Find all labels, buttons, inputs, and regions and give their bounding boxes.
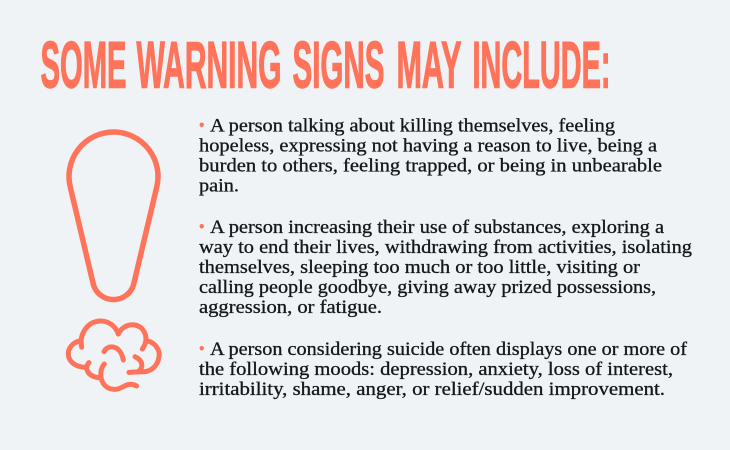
text block: warning sign talking about suicide <box>198 116 662 196</box>
text block: warning sign talking about suicide: burden to others, feeling trapped, or being in unbearable <box>199 156 662 176</box>
title <box>40 27 610 101</box>
text block: warning sign behaviours: calling people goodbye, giving away prized possessions, <box>199 277 656 298</box>
text block: warning sign moods: the following moods: depression, anxiety, loss of interest, <box>199 359 673 380</box>
text block: warning sign behaviours <box>198 217 692 318</box>
text block: warning sign moods <box>198 339 688 400</box>
text block: warning sign behaviours: aggression, or fatigue. <box>199 297 382 318</box>
title: SIGNS <box>292 27 384 101</box>
text block: warning sign behaviours: A person increasing their use of substances, exploring a <box>210 217 665 238</box>
text block: warning sign moods: irritability, shame, anger, or relief/sudden improvement. <box>199 379 665 400</box>
text block: warning sign talking about suicide: A person talking about killing themselves, feeling <box>210 116 615 136</box>
icon: exclamation mark outline <box>69 132 158 300</box>
title: WARNING <box>136 27 282 101</box>
title: SOME <box>40 27 126 101</box>
icon: brain <box>68 321 159 389</box>
text block: warning sign moods: A person considering suicide often displays one or more of <box>210 339 688 360</box>
text block: warning sign talking about suicide: • <box>198 116 205 136</box>
text block: warning sign moods: • <box>198 340 205 360</box>
text block: warning sign behaviours: way to end their lives, withdrawing from activities, isolating <box>199 237 692 258</box>
text block: warning sign behaviours: themselves, sleeping too much or too little, visiting or <box>199 257 641 278</box>
text block: warning sign talking about suicide: pain. <box>199 176 239 196</box>
text block: warning sign behaviours: • <box>198 218 205 238</box>
title: MAY <box>396 27 462 101</box>
text block: warning sign talking about suicide: hopeless, expressing not having a reason to live, being a <box>199 136 658 156</box>
